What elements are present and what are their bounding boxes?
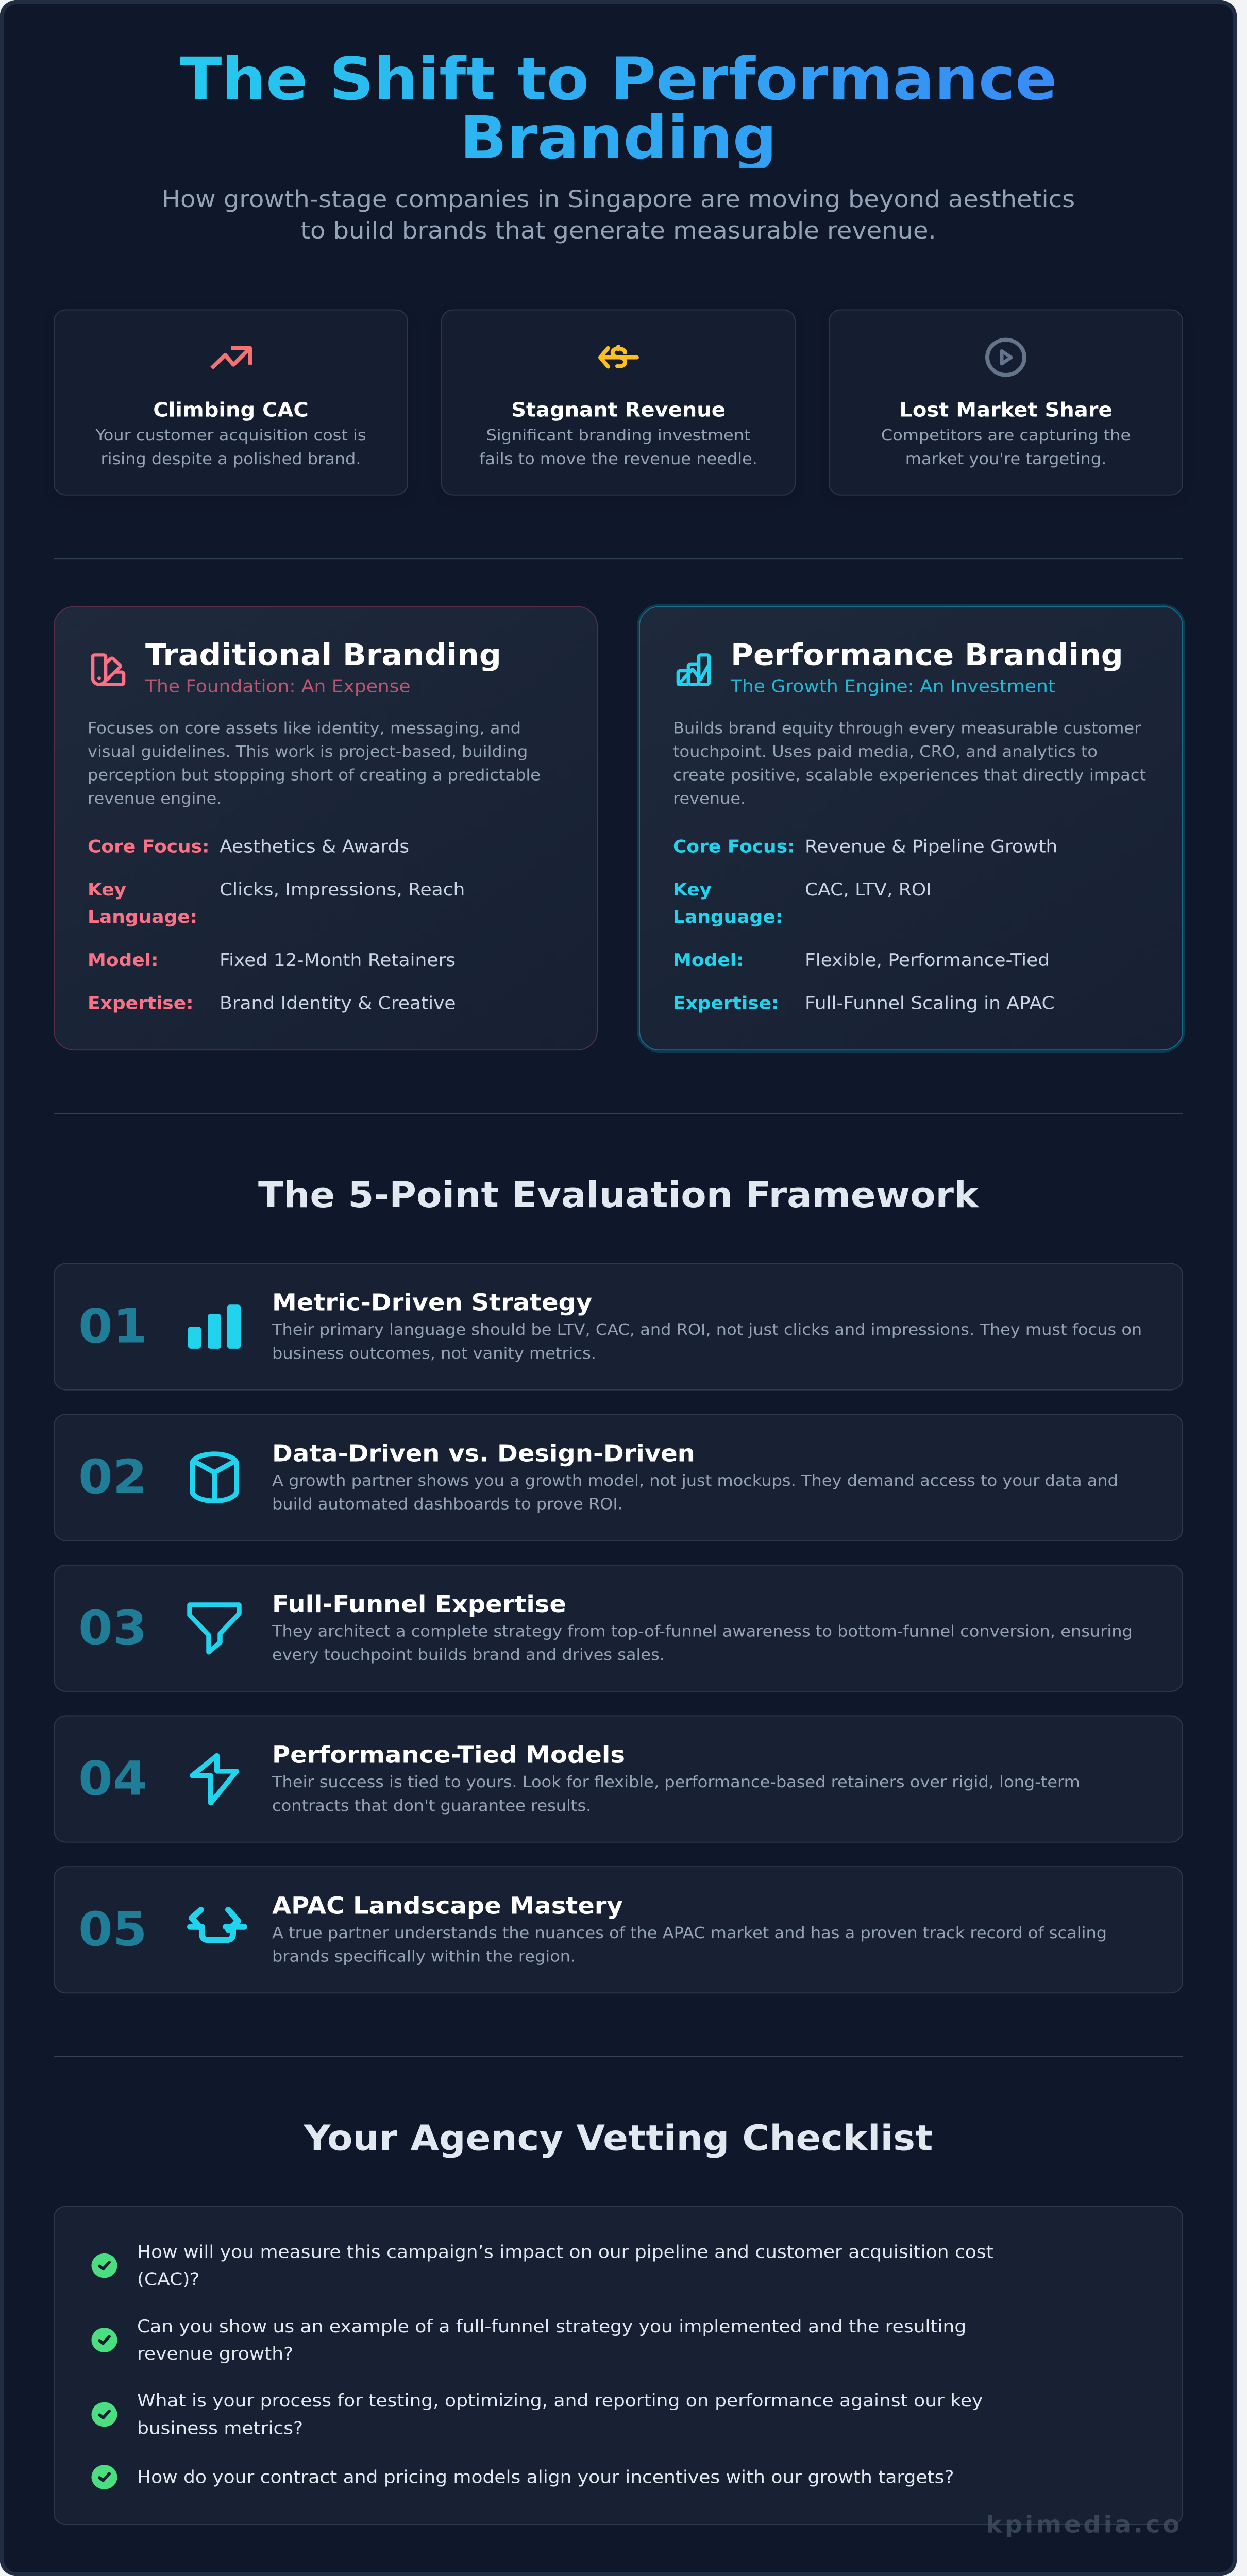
icon: swatch: [91, 653, 126, 686]
heading: traditional branding: Traditional Branding: [145, 638, 501, 672]
value: expertise: Full-Funnel Scaling in APAC: [805, 993, 1055, 1013]
value: core focus: Aesthetics & Awards: [220, 837, 409, 857]
label: core focus: Core Focus:: [673, 837, 795, 857]
text: climbing CAC: [95, 426, 366, 468]
panel: step 03: [54, 1565, 1183, 1692]
description: [88, 719, 541, 808]
description: business outcomes, not vanity metrics.: [272, 1344, 596, 1362]
label: model: Model:: [88, 950, 158, 970]
description: visual guidelines. This work is project-based, building: [88, 742, 528, 761]
value: model: Fixed 12-Month Retainers: [220, 950, 456, 970]
tagline: The Growth Engine: An Investment: [731, 676, 1055, 697]
icon: trending up arrow: [210, 346, 252, 370]
question 1: (CAC)?: [137, 2269, 199, 2290]
question 3: [137, 2387, 983, 2443]
title: The Shift to Performance: [180, 45, 1057, 113]
description: They architect a complete strategy from top-of-funnel awareness to bottom-funnel conversion, ensuring: [272, 1622, 1133, 1640]
description: perception but stopping short of creating a predictable: [88, 766, 541, 784]
label: key language: Key: [88, 880, 126, 900]
text: lost market share: Competitors are capturing the: [881, 426, 1131, 445]
label: core focus: Core Focus:: [88, 837, 210, 857]
text: climbing CAC: rising despite a polished brand.: [100, 449, 361, 468]
description: revenue.: [673, 789, 746, 808]
heading: stagnant revenue: Stagnant Revenue: [511, 399, 726, 421]
description: Focuses on core assets like identity, messaging, and: [88, 719, 521, 737]
text: lost market share: market you're targeting.: [905, 449, 1106, 468]
number 04: 04: [78, 1751, 147, 1806]
text: stagnant revenue: Significant branding investment: [486, 426, 751, 445]
heading: Full-Funnel Expertise: [272, 1590, 566, 1618]
title: Branding: [460, 104, 777, 172]
question 1: How will you measure this campaign’s impact on our pipeline and customer acquisition cost: [137, 2242, 993, 2262]
panel: step 04: [54, 1716, 1183, 1843]
text: stagnant revenue: [479, 426, 757, 468]
number 01: 01: [78, 1299, 147, 1353]
value: key language: Clicks, Impressions, Reach: [220, 880, 465, 900]
panel: lost market share: [829, 310, 1183, 496]
icon: check 2: [88, 2325, 121, 2355]
label: expertise: Expertise:: [88, 993, 194, 1013]
number 05: 05: [78, 1902, 147, 1957]
description: revenue engine.: [88, 789, 222, 808]
description: every touchpoint builds brand and drives sales.: [272, 1646, 665, 1664]
panel: climbing CAC: [54, 310, 408, 496]
value: expertise: Brand Identity & Creative: [220, 993, 456, 1013]
heading: Metric-Driven Strategy: [272, 1289, 592, 1316]
panel: traditional branding: [54, 606, 598, 1050]
title: [54, 50, 1183, 168]
label: key language: Language:: [673, 907, 783, 927]
description: contracts that don't guarantee results.: [272, 1796, 591, 1815]
label: model: Model:: [673, 950, 744, 970]
icon: dollar with arrow: [598, 345, 639, 369]
label: key language: Language:: [88, 907, 197, 927]
question 2: [137, 2313, 966, 2368]
icon: check 3: [88, 2399, 121, 2430]
icon: check 1: [88, 2250, 121, 2281]
number 02: 02: [78, 1450, 147, 1504]
panel: stagnant revenue: [441, 310, 796, 496]
icon: funnel: [187, 1602, 242, 1655]
icon: bar chart with trend line: [676, 653, 711, 686]
text: climbing CAC: Your customer acquisition cost is: [95, 426, 366, 445]
icon: cube cylinder: [190, 1451, 239, 1503]
description: Builds brand equity through every measurable customer: [673, 719, 1141, 737]
label: key language: [673, 880, 783, 927]
icon: check 4: [88, 2462, 121, 2493]
question 2: Can you show us an example of a full-funnel strategy you implemented and the resulting: [137, 2316, 966, 2336]
description: [272, 1320, 1142, 1362]
panel: step 01: [54, 1263, 1183, 1391]
description: Their success is tied to yours. Look for flexible, performance-based retainers over rigid, long-term: [272, 1773, 1080, 1791]
heading: lost market share: Lost Market Share: [899, 399, 1113, 421]
heading: APAC Landscape Mastery: [272, 1892, 623, 1920]
label: key language: [88, 880, 197, 927]
panel: step 05: [54, 1866, 1183, 1993]
description: build automated dashboards to prove ROI.: [272, 1495, 623, 1513]
subtitle: to build brands that generate measurable revenue.: [300, 217, 936, 244]
panel: step 02: [54, 1414, 1183, 1541]
description: [272, 1471, 1118, 1513]
panel: performance branding: [639, 606, 1183, 1050]
question 3: What is your process for testing, optimizing, and reporting on performance against our key: [137, 2391, 983, 2411]
icon: signal bars: [188, 1304, 241, 1349]
description: Their primary language should be LTV, CAC, and ROI, not just clicks and impressions. They must focus on: [272, 1320, 1142, 1339]
icon: linked arrows: [187, 1907, 247, 1943]
description: [272, 1622, 1133, 1664]
subtitle: [162, 185, 1075, 244]
watermark: kpimedia.co: [986, 2511, 1182, 2538]
value: model: Flexible, Performance-Tied: [805, 950, 1050, 970]
icon: lightning bolt: [190, 1753, 239, 1805]
description: create positive, scalable experiences that directly impact: [673, 766, 1146, 784]
heading: climbing CAC: Climbing CAC: [153, 399, 309, 421]
heading: Performance-Tied Models: [272, 1741, 625, 1769]
description: touchpoint. Uses paid media, CRO, and analytics to: [673, 742, 1098, 761]
description: A growth partner shows you a growth model, not just mockups. They demand access to your data and: [272, 1471, 1118, 1489]
heading: Data-Driven vs. Design-Driven: [272, 1440, 695, 1467]
panel: checklist: [54, 2206, 1183, 2525]
description: [272, 1923, 1107, 1965]
question 2: revenue growth?: [137, 2344, 293, 2364]
description: A true partner understands the nuances of the APAC market and has a proven track record of scaling: [272, 1923, 1107, 1942]
value: core focus: Revenue & Pipeline Growth: [805, 837, 1057, 857]
question 4: How do your contract and pricing models align your incentives with our growth targets?: [137, 2467, 954, 2487]
value: key language: CAC, LTV, ROI: [805, 880, 932, 900]
description: [673, 719, 1146, 808]
label: expertise: Expertise:: [673, 993, 779, 1013]
subtitle: How growth-stage companies in Singapore are moving beyond aesthetics: [162, 185, 1075, 213]
question 1: [137, 2239, 993, 2294]
number 03: 03: [78, 1600, 147, 1655]
label: key language: Key: [673, 880, 712, 900]
text: lost market share: [881, 426, 1131, 468]
heading: evaluation framework: The 5-Point Evaluation Framework: [258, 1175, 979, 1215]
tagline: The Foundation: An Expense: [145, 676, 411, 697]
heading: vetting checklist: Your Agency Vetting Checklist: [304, 2117, 933, 2158]
description: [272, 1773, 1080, 1815]
heading: performance branding: Performance Branding: [731, 638, 1123, 672]
icon: play circle: [985, 338, 1026, 377]
question 3: business metrics?: [137, 2418, 303, 2438]
text: stagnant revenue: fails to move the revenue needle.: [479, 449, 757, 468]
description: brands specifically within the region.: [272, 1947, 576, 1965]
